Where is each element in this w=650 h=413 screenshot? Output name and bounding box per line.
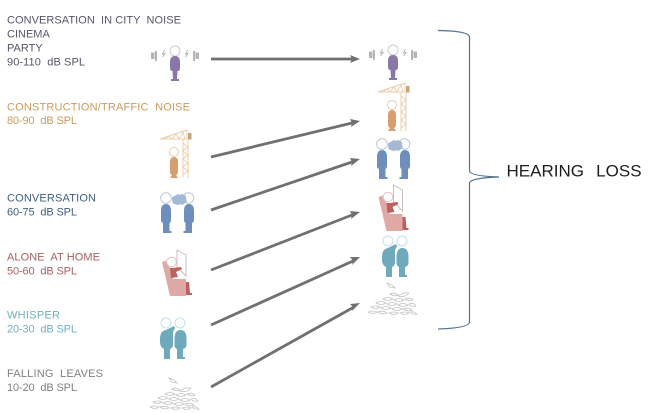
label: conversation in city noise, cinema, party: PARTY (7, 42, 43, 54)
label: alone at home: ALONE AT HOME (7, 252, 100, 264)
arrow: whisper (211, 257, 360, 325)
label: whisper: WHISPER (7, 310, 60, 322)
icon: person in armchair, left (162, 250, 192, 296)
icon: two people whispering, right (382, 236, 408, 277)
label: conversation: 60-75 dB SPL (7, 206, 77, 218)
icon: person with speakers, left (151, 46, 199, 81)
icon: pile of leaves, left (150, 378, 199, 410)
label: conversation in city noise, cinema, party: 90-110 dB SPL (7, 56, 85, 68)
label: falling leaves: FALLING LEAVES (7, 368, 103, 380)
label: alone at home: 50-60 dB SPL (7, 266, 77, 278)
label: falling leaves: 10-20 dB SPL (7, 382, 77, 394)
label: conversation in city noise, cinema, party: CONVERSATION IN CITY NOISE (7, 14, 181, 26)
icon: person with crane, right (378, 83, 410, 131)
icon: pile of leaves, right (368, 283, 417, 314)
label: construction/traffic noise: 80-90 dB SPL (7, 115, 77, 127)
arrow: party (211, 55, 360, 63)
arrow: alone at home (211, 211, 360, 270)
label: alone at home (7, 252, 100, 278)
heading: hearing loss: HEARING LOSS (506, 162, 642, 180)
icon: person in armchair, right (378, 185, 408, 231)
label: construction/traffic noise (7, 102, 190, 127)
label: falling leaves (7, 368, 103, 394)
label: conversation in city noise, cinema, party (7, 14, 181, 68)
right curly brace (438, 30, 499, 329)
icon: two people conversing, right (377, 139, 410, 179)
label: conversation in city noise, cinema, party: CINEMA (7, 28, 50, 40)
label: conversation: CONVERSATION (7, 192, 96, 204)
icon: two people conversing, left (161, 193, 194, 233)
icon: person with speakers, right (369, 45, 417, 80)
icon: two people whispering, left (160, 318, 186, 359)
label: construction/traffic noise: CONSTRUCTION/TRAFFIC NOISE (7, 102, 190, 114)
arrow: construction (211, 119, 360, 157)
label: conversation (7, 192, 96, 218)
arrow: conversation (211, 158, 360, 210)
arrows (211, 55, 360, 387)
label: whisper: 20-30 dB SPL (7, 324, 77, 336)
label: whisper (7, 310, 77, 336)
arrow: falling leaves (211, 303, 360, 387)
icon: person with crane, left (160, 130, 192, 178)
